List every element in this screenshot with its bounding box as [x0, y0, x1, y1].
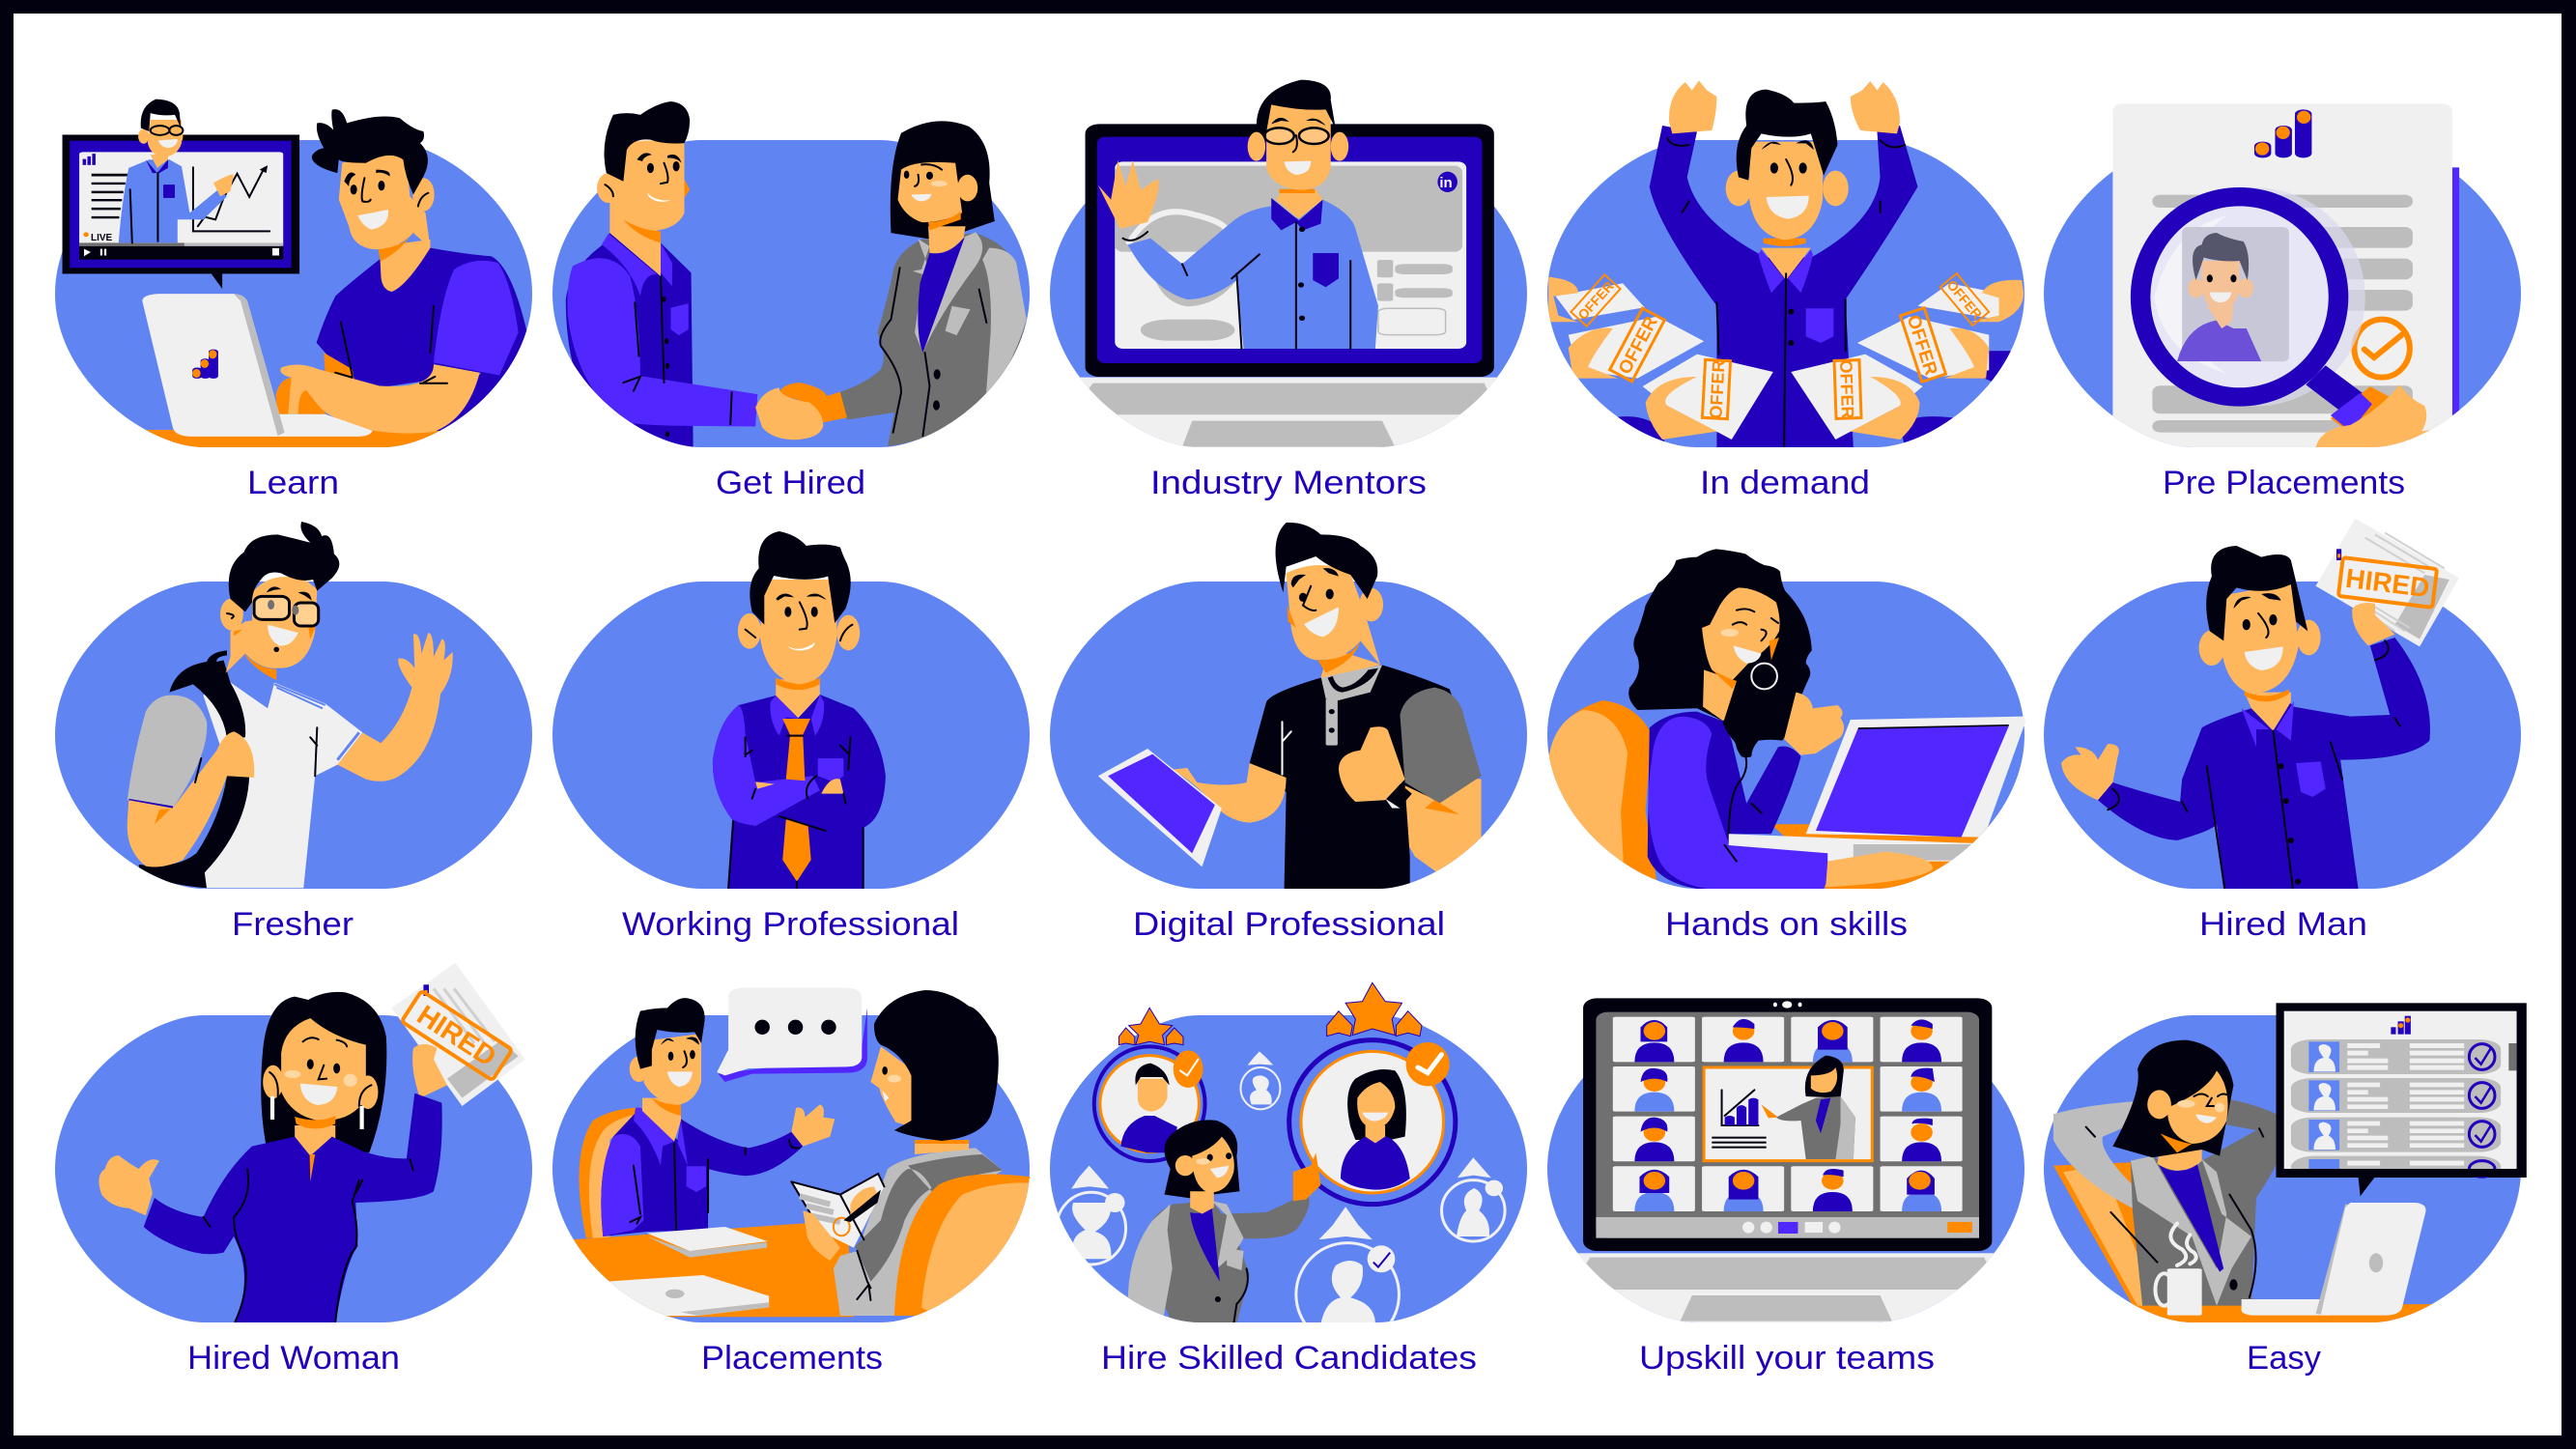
dress: [144, 1094, 442, 1323]
woman: [2053, 1040, 2289, 1306]
OFFER stamps: [1571, 273, 1989, 419]
blob background: [55, 140, 532, 447]
head: [738, 531, 860, 684]
illustration: woman using laptop: [1548, 549, 2025, 889]
suit body: [713, 678, 886, 889]
coffee mug: [2155, 1224, 2202, 1316]
blob background: [2044, 582, 2521, 889]
illustration: recruiter choosing candidates: [1057, 982, 1505, 1346]
label: In demand: [1700, 465, 1870, 501]
man celebrating: [1650, 80, 1917, 447]
desk and chair: [1548, 700, 1989, 889]
label: Pre Placements: [2163, 465, 2405, 501]
panel: Working Professional: [552, 531, 1030, 943]
label: Easy: [2247, 1340, 2321, 1377]
shirt: [2098, 638, 2430, 889]
thumbs up and watch: [1339, 726, 1459, 814]
magnifier: [2131, 187, 2440, 447]
panel: Industry Mentors: [1050, 80, 1527, 501]
illustration: relaxed woman and candidate list: [2053, 1003, 2527, 1322]
head: [2199, 546, 2321, 694]
illustration: man holding hired letter: [2061, 519, 2459, 889]
screen tag LIVE: LIVE: [91, 233, 113, 243]
panel: Hire Skilled Candidates: [1050, 982, 1527, 1377]
laptop: [142, 294, 373, 437]
blob background: [1050, 1015, 1527, 1322]
table with items: [573, 1220, 854, 1317]
illustration: magnifier over resume: [2112, 103, 2459, 451]
monitor base: [1063, 378, 1509, 447]
head with glasses: [220, 522, 339, 680]
waving arm: [337, 633, 453, 781]
HIRED stamp: [402, 991, 512, 1080]
blob background: [55, 1015, 532, 1322]
man: [566, 101, 757, 447]
blob background: [1050, 140, 1527, 447]
woman: [840, 121, 1027, 446]
label: Placements: [701, 1340, 883, 1377]
OFFER stamps: OFFER: [1615, 313, 1662, 378]
black polo: [1250, 665, 1482, 889]
OFFER stamps: OFFER: [1706, 359, 1729, 419]
illustration: man with tablet: [1098, 523, 1482, 889]
label: Hands on skills: [1665, 906, 1908, 943]
panel: Easy: [2044, 1003, 2527, 1377]
panel: Hired Man: [2044, 519, 2521, 943]
illustration: man receiving offers: [1548, 80, 2024, 447]
candidate list monitor: [2276, 1003, 2527, 1196]
label: Hired Woman: [187, 1340, 400, 1377]
blob background: [1050, 582, 1527, 889]
OFFER stamps: OFFER: [1903, 313, 1941, 379]
hair back: [261, 992, 386, 1152]
blob background: [2044, 140, 2521, 447]
offer cards with hands: [1548, 277, 2024, 447]
label: Get Hired: [716, 465, 865, 501]
blob background: [1547, 1015, 2024, 1322]
label: Digital Professional: [1133, 906, 1445, 943]
illustration: man with crossed arms: [713, 531, 886, 889]
OFFER stamps: OFFER: [1574, 278, 1617, 323]
panel: Pre Placements: [2044, 103, 2521, 501]
participant tiles: [1613, 1017, 1963, 1211]
panel: Learn: [55, 99, 532, 501]
panel: Hired Woman: [55, 963, 532, 1377]
OFFER stamps: OFFER: [1944, 277, 1985, 322]
faded avatars: [1057, 1051, 1505, 1346]
monitor base: [1558, 1253, 2004, 1322]
label: Working Professional: [622, 906, 959, 943]
man: [601, 998, 835, 1236]
laptop: [2242, 1203, 2426, 1316]
desk and chair: [2053, 1162, 2440, 1322]
mentor: [1098, 80, 1378, 349]
head: [1276, 523, 1383, 678]
HIRED stamp: HIRED: [2344, 563, 2431, 603]
illustration: man learning from a laptop: [63, 99, 527, 450]
label: Hire Skilled Candidates: [1101, 1340, 1477, 1377]
panel: Get Hired: [552, 101, 1030, 501]
illustration: handshake: [566, 101, 1027, 447]
candidate woman avatar: [1289, 1040, 1456, 1205]
illustration: student with backpack: [127, 522, 453, 888]
illustration: online class on a monitor: [1558, 998, 2004, 1322]
face: [1702, 587, 1780, 689]
blob background: [55, 582, 532, 889]
stars: [1118, 982, 1422, 1045]
woman from behind: [791, 990, 1036, 1316]
blob background: [552, 140, 1030, 447]
blob background: [1547, 582, 2024, 889]
monitor screen: [1086, 124, 1494, 377]
thumbs-up hand: [2061, 744, 2119, 800]
presenter tile: [1704, 1056, 1872, 1161]
panel: Upskill your teams: [1547, 998, 2024, 1377]
OFFER stamps: OFFER: [1836, 359, 1857, 419]
thumbs up: [1784, 693, 1844, 755]
white t-shirt: [203, 682, 363, 889]
blob background: [2044, 1015, 2521, 1322]
blob background: [552, 582, 1030, 889]
tablet hand and arm: [1098, 749, 1287, 867]
label: Learn: [247, 465, 339, 501]
grey sleeve and arm: [127, 650, 254, 888]
LinkedIn badge: in: [1439, 175, 1453, 191]
laptop: [1729, 717, 2025, 887]
waving hand: [99, 1155, 159, 1215]
video monitor: [63, 99, 299, 289]
panel: In demand: [1547, 80, 2024, 501]
man with shirt: [276, 109, 527, 434]
panel: Hands on skills: [1547, 549, 2025, 943]
panel: Fresher: [55, 522, 532, 943]
blob background: [552, 1015, 1030, 1322]
illustration: woman holding hired letter: [99, 963, 525, 1323]
speech bubble: [717, 988, 867, 1082]
panel: Placements: [552, 988, 1036, 1377]
candidate man avatar: [1094, 1046, 1205, 1161]
face: [263, 1018, 378, 1129]
illustration: interview at a table: [573, 988, 1036, 1317]
handshake: [755, 383, 847, 440]
chair of man: [579, 1108, 637, 1238]
hired letter: [391, 963, 525, 1106]
hired letter: [2315, 519, 2459, 646]
monitor bezel: [1583, 998, 1992, 1251]
panel: Digital Professional: [1050, 523, 1527, 943]
blob background: [1547, 140, 2024, 447]
label: Fresher: [232, 906, 354, 943]
label: Hired Man: [2199, 906, 2367, 943]
hair: [1628, 549, 1812, 757]
right arm: [1404, 779, 1482, 871]
label: Industry Mentors: [1150, 465, 1427, 501]
illustration: mentor on a monitor: [1063, 80, 1509, 447]
label: Upskill your teams: [1639, 1340, 1935, 1377]
woman body: [1648, 669, 1831, 889]
recruiter woman: [1128, 1120, 1320, 1323]
HIRED stamp: HIRED: [411, 1000, 501, 1073]
resume sheet: [2112, 103, 2459, 451]
